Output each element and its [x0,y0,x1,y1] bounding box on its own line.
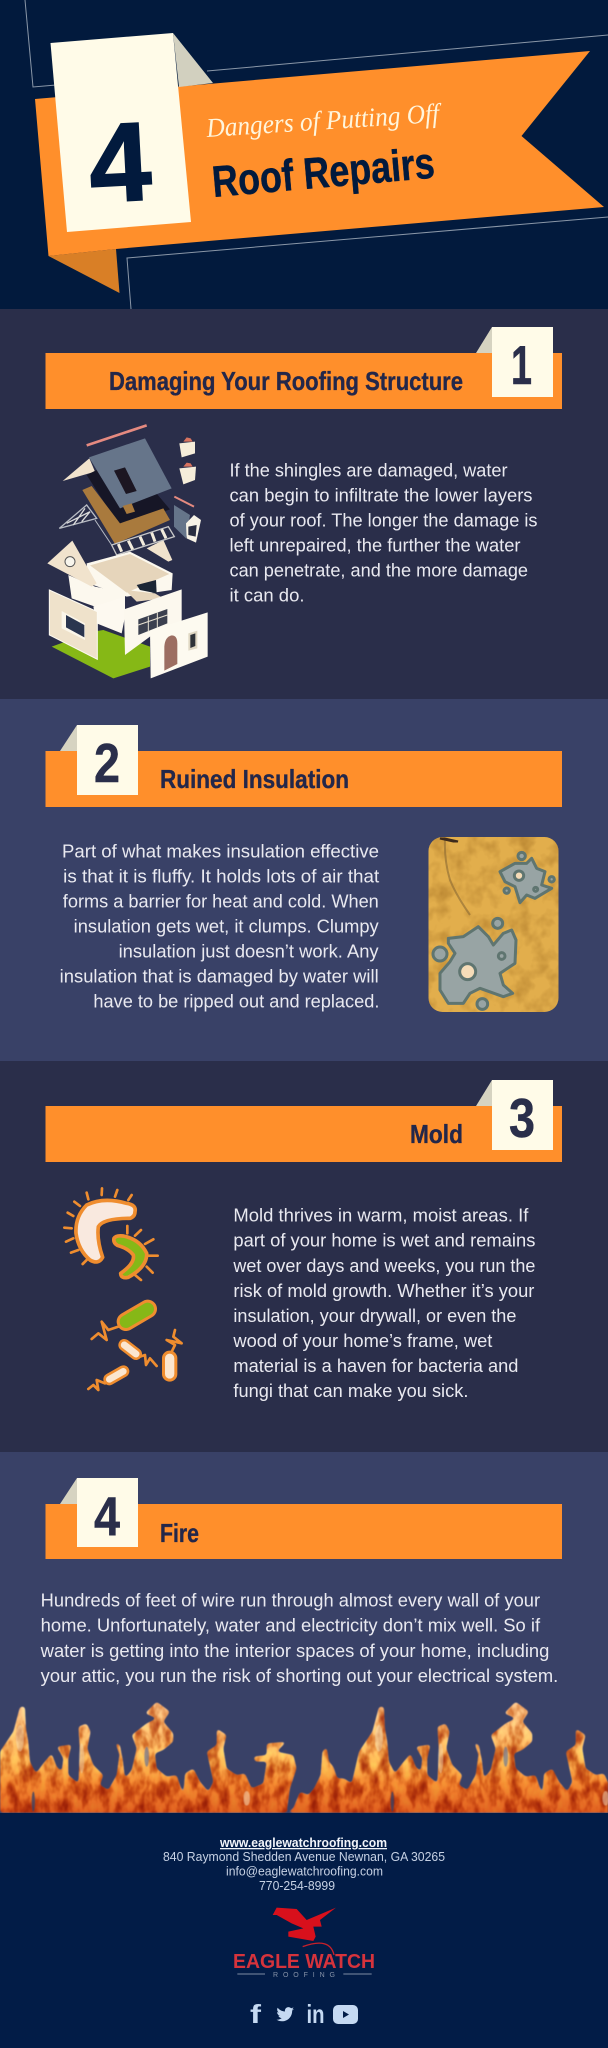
heading bar 1: 1 [511,334,532,396]
body text 3: wood of your home’s frame, wet [232,1331,492,1351]
heading bar 4: 4 [94,1485,120,1547]
body text 4: your attic, you run the risk of shorting out your electrical system. [41,1666,558,1686]
heading bar 2: 2 [94,732,120,794]
flames strip [0,1702,608,1813]
panel: section 3 [0,1061,608,1452]
panel: section 1 [0,309,608,699]
body text 4 [40,1591,558,1686]
body text 2: is that it is fluffy. It holds lots of air that [63,866,379,886]
body text 1: If the shingles are damaged, water [230,461,508,481]
body text 3: risk of mold growth. Whether it’s your [233,1281,534,1301]
body text 3: Mold thrives in warm, moist areas. If [233,1206,529,1226]
body text 1: of your roof. The longer the damage is [230,511,538,531]
heading bar 3 [46,1080,562,1162]
website link: www.eaglewatchroofing.com [219,1835,387,1850]
body text 2: insulation gets wet, it clumps. Clumpy [74,916,379,936]
ribbon fold [48,249,120,293]
icon: exploded house [47,425,208,678]
large number 4: 4 [86,99,154,227]
heading bar 3: Mold [410,1119,463,1149]
heading bar 4: Fire [160,1518,199,1548]
body text 1: it can do. [230,586,304,606]
body text 3 [232,1206,535,1401]
icon: linkedin: in [306,1999,324,2029]
heading bar 4 [46,1478,562,1559]
image: mouldy insulation [428,837,558,1012]
body text 2 [60,842,379,1012]
header panel [0,0,608,309]
body text 3: material is a haven for bacteria and [233,1356,518,1376]
address: 840 Raymond Shedden Avenue Newnan, GA 30265 [163,1849,445,1864]
script title: Dangers of Putting Off [205,98,443,143]
panel: section 2 [0,699,608,1061]
icon: youtube [333,2005,358,2024]
panel: footer [0,1813,608,2048]
body text 2: insulation just doesn’t work. Any [119,942,379,962]
body text 1: can penetrate, and the more damage [230,561,528,581]
body text 4: home. Unfortunately, water and electricity don’t mix well. So if [41,1616,541,1636]
body text 4: Hundreds of feet of wire run through almost every wall of your [41,1591,540,1611]
logo: Eagle Watch Roofing [233,1908,375,1979]
body text 1: can begin to infiltrate the lower layers [230,486,532,506]
icon: bacteria [64,1188,182,1390]
body text 3: part of your home is wet and remains [233,1231,535,1251]
icon: facebook: f [250,1999,261,2029]
heading bar 2: Ruined Insulation [160,764,349,794]
icon: twitter [276,2007,294,2021]
body text 2: Part of what makes insulation effective [62,842,379,862]
logo: Eagle Watch Roofing: EAGLE WATCH [233,1951,375,1973]
body text 2: insulation that is damaged by water will [60,966,379,986]
body text 4: water is getting into the interior spaces of your home, including [40,1641,549,1661]
email: info@eaglewatchroofing.com [226,1864,383,1878]
main title: Roof Repairs [210,139,437,207]
panel: section 4 [0,1452,608,1813]
body text 2: forms a barrier for heat and cold. When [63,892,379,912]
phone: 770-254-8999 [259,1878,335,1893]
body text 3: fungi that can make you sick. [233,1381,468,1401]
card fold [173,33,213,87]
heading bar 2 [46,725,562,807]
body text 3: insulation, your drywall, or even the [233,1306,516,1326]
logo: Eagle Watch Roofing: ROOFING [273,1972,335,1979]
heading bar 1: Damaging Your Roofing Structure [109,366,463,396]
number card [50,33,191,232]
social icons [250,1999,358,2029]
heading bar 1 [46,327,562,409]
body text 1 [230,461,538,606]
body text 2: have to be ripped out and replaced. [93,992,379,1012]
heading bar 3: 3 [509,1087,535,1149]
orange ribbon banner [35,51,604,256]
body text 3: wet over days and weeks, you run the [232,1256,535,1276]
body text 1: left unrepaired, the further the water [230,536,520,556]
